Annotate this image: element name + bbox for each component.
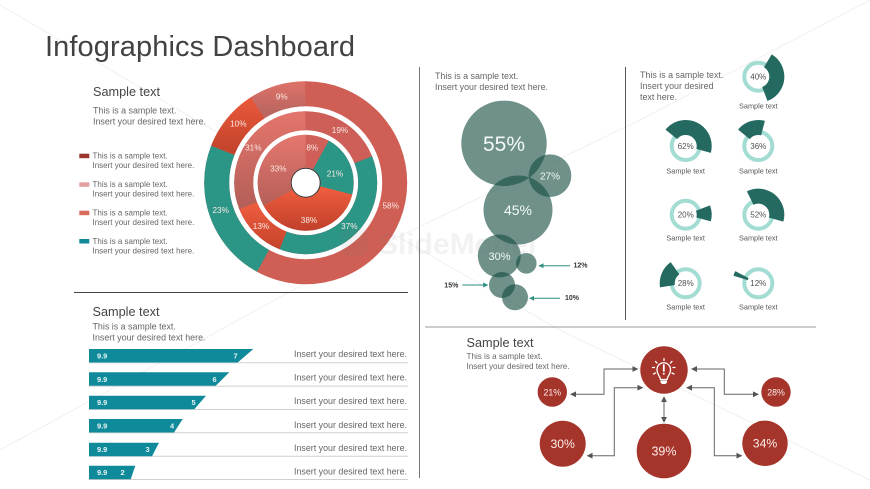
- gauge 20%: 20%: [678, 210, 694, 220]
- node 21%: [538, 377, 567, 407]
- legend: This is a sample text.: [92, 208, 168, 218]
- gauge 62%: [660, 120, 712, 176]
- bubble panel description: Insert your desired text here.: [435, 82, 548, 92]
- donut panel description: [93, 106, 206, 126]
- panel: donut text and legend: [79, 85, 206, 256]
- gauge 28%: Sample text: [666, 302, 705, 312]
- node 30%: [540, 421, 586, 467]
- node 34%: [742, 421, 788, 466]
- bubble values: 45%: [504, 202, 532, 218]
- bar panel description: Insert your desired text here.: [92, 332, 205, 342]
- gauge 40%: [733, 51, 784, 110]
- gauge 52%: 52%: [750, 210, 766, 220]
- bubble callouts: 12%: [574, 262, 588, 270]
- center hole: [291, 168, 320, 197]
- node 39%: 39%: [651, 444, 677, 458]
- node 30%: 30%: [550, 437, 575, 451]
- bar descriptions: Insert your desired text here.: [294, 466, 407, 476]
- gauge 36%: Sample text: [739, 166, 778, 176]
- network panel description: [466, 352, 570, 371]
- bar labels: 7: [234, 352, 238, 360]
- bar descriptions: Insert your desired text here.: [294, 396, 407, 406]
- gauge 28%: [665, 262, 707, 312]
- donut value labels: 37%: [341, 222, 357, 231]
- watermark: SlideModel: [378, 228, 536, 261]
- bar descriptions: Insert your desired text here.: [294, 420, 407, 430]
- panel: idea network: [466, 336, 791, 478]
- bubbles: [461, 101, 571, 310]
- donut value labels: 23%: [213, 206, 229, 215]
- donut panel description: Insert your desired text here.: [93, 116, 206, 126]
- bar labels: 5: [192, 398, 196, 407]
- gauge 28%: 28%: [678, 279, 694, 288]
- donut value labels: 58%: [383, 202, 399, 211]
- node 21%: 21%: [543, 388, 561, 398]
- bubble values: 30%: [488, 251, 511, 263]
- network panel description: This is a sample text.: [466, 352, 543, 361]
- bubble callouts: 15%: [444, 282, 459, 290]
- gauge panel description: Insert your desired: [640, 81, 714, 91]
- gauge panel description: [640, 70, 723, 102]
- bar labels: 3: [146, 445, 150, 454]
- donut value labels: 38%: [301, 216, 317, 225]
- heading: donut panel: Sample text: [93, 85, 160, 99]
- bar descriptions: Insert your desired text here.: [294, 372, 407, 382]
- heading: bar panel: Sample text: [92, 305, 160, 319]
- panel: small ring gauges: [640, 51, 784, 311]
- donut value labels: 21%: [327, 169, 343, 178]
- legend: This is a sample text.: [92, 237, 168, 246]
- bars: [89, 349, 253, 479]
- donut value labels: 9%: [276, 93, 288, 102]
- donut value labels: 31%: [245, 143, 261, 152]
- bubble values: 55%: [483, 133, 525, 156]
- divider lines: [74, 67, 816, 478]
- bar labels: [97, 352, 238, 477]
- gauge 40%: Sample text: [739, 102, 778, 110]
- legend: [79, 152, 194, 256]
- bar labels: 2: [120, 468, 125, 477]
- legend: This is a sample text.: [92, 152, 168, 160]
- panel: bubbles: [435, 71, 588, 310]
- bar labels: 9.9: [97, 445, 107, 454]
- legend: Insert your desired text here.: [92, 218, 194, 227]
- bubble callouts: 10%: [565, 295, 580, 302]
- gauge 36%: [732, 120, 784, 176]
- donut value labels: 19%: [332, 126, 348, 135]
- bar labels: 9.9: [97, 375, 107, 384]
- bar labels: 9.9: [97, 468, 107, 477]
- outer ring: [217, 94, 395, 272]
- bar labels: 9.9: [97, 398, 107, 407]
- legend: This is a sample text.: [92, 180, 168, 189]
- gauge 12%: [735, 260, 781, 312]
- donut value labels: 10%: [230, 120, 246, 129]
- bubble panel description: [435, 71, 548, 92]
- donut value labels: [213, 93, 399, 231]
- gauge panel description: This is a sample text.: [640, 70, 723, 80]
- bar labels: 9.9: [97, 352, 107, 360]
- icon: light bulb circle: [640, 346, 688, 394]
- donut value labels: 33%: [270, 164, 286, 173]
- gauge 20%: Sample text: [666, 234, 705, 242]
- bar panel description: This is a sample text.: [92, 322, 176, 332]
- gauge 20%: [662, 191, 710, 242]
- bubble callouts: [444, 262, 588, 302]
- gauge 52%: Sample text: [739, 234, 778, 242]
- bar labels: 9.9: [97, 422, 107, 430]
- panel: bar list: [89, 305, 408, 480]
- donut value labels: 8%: [306, 143, 318, 152]
- gauge 62%: 62%: [678, 142, 694, 151]
- bubble arrows: [462, 266, 570, 298]
- gauge 12%: Sample text: [739, 302, 778, 312]
- bar labels: 4: [170, 422, 175, 430]
- inner ring: [274, 151, 337, 214]
- node 34%: 34%: [753, 436, 777, 450]
- middle ring: [244, 121, 368, 245]
- donut value labels: 13%: [253, 222, 269, 231]
- bar labels: 6: [212, 375, 217, 384]
- bubble panel description: This is a sample text.: [435, 71, 518, 81]
- bar descriptions: [294, 349, 407, 476]
- legend: Insert your desired text here.: [92, 190, 194, 198]
- heading: network panel: Sample text: [466, 336, 534, 350]
- bar descriptions: Insert your desired text here.: [294, 349, 407, 359]
- bar descriptions: Insert your desired text here.: [294, 443, 407, 453]
- title: Infographics Dashboard: [45, 31, 355, 63]
- gauge 12%: 12%: [750, 279, 766, 288]
- bar underlines: [89, 363, 408, 480]
- node 28%: [761, 377, 791, 407]
- connector arrows: [571, 369, 758, 456]
- node 39%: [637, 424, 691, 478]
- donut chart: [213, 93, 399, 272]
- gauge 62%: Sample text: [666, 166, 705, 176]
- bubble values: 27%: [540, 172, 560, 182]
- network panel description: Insert your desired text here.: [466, 362, 570, 371]
- legend: Insert your desired text here.: [92, 161, 194, 170]
- gauge 36%: 36%: [750, 142, 766, 151]
- gauge panel description: text here.: [640, 92, 677, 102]
- bar panel description: [92, 322, 205, 342]
- gauge 52%: [734, 190, 783, 242]
- bubble values: [483, 133, 560, 263]
- node 28%: 28%: [767, 388, 785, 398]
- gauge 40%: 40%: [750, 72, 766, 82]
- donut panel description: This is a sample text.: [93, 106, 176, 116]
- legend: Insert your desired text here.: [92, 246, 194, 256]
